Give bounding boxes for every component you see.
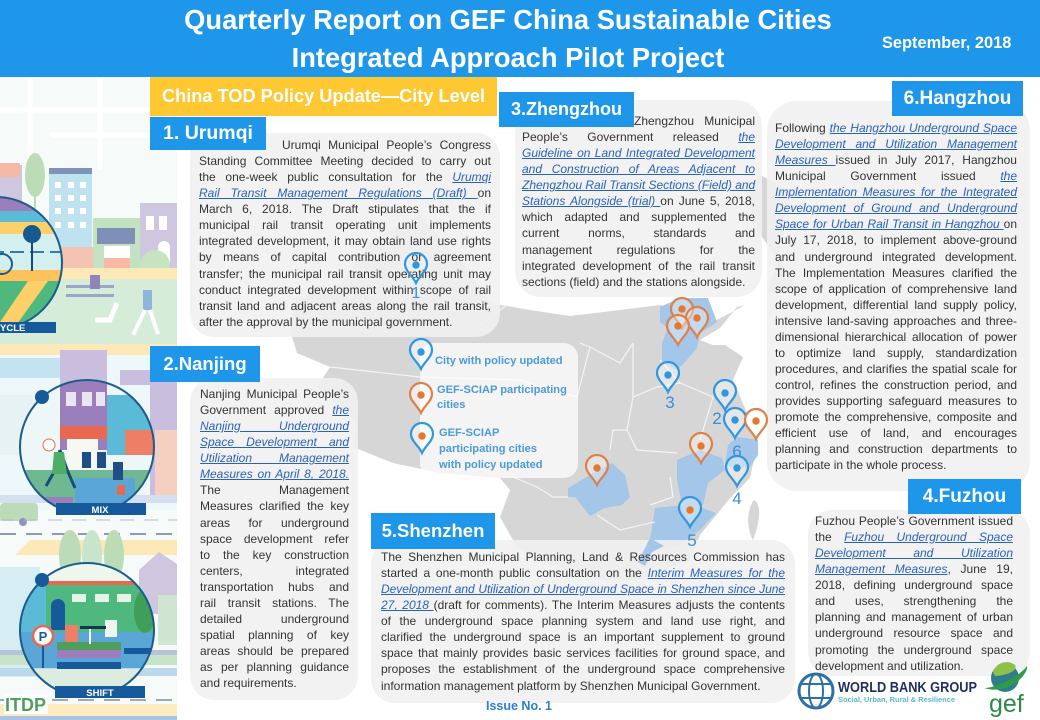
text: Urumqi: transit land and adjacent areas along the rail transit, (199, 299, 491, 313)
text: Nanjing: space development refer (200, 532, 349, 546)
legend: GEF-SCIAP participating cities: GEF-SCIAP participating (437, 384, 567, 396)
text: Fuzhou: planning and management of urban (815, 610, 1013, 624)
text: Hangzhou: promote the comprehensive, composite and (775, 410, 1017, 424)
text: Fuzhou: underground resource space and (815, 626, 1013, 640)
text: Hangzhou: dimensional hierarchical allocation of power (775, 330, 1017, 344)
plaza and paths (0, 268, 177, 355)
text: Fuzhou: promoting the underground space (815, 642, 1013, 656)
text: Hangzhou: control, refines the construction period, and (775, 378, 1017, 392)
text: Hangzhou: efficient use of land, and encourages (775, 426, 1017, 440)
text: Nanjing: Measures on April 8, 2018. (200, 467, 349, 481)
pin: 3 Zhengzhou: 3 (665, 393, 675, 412)
map: Guangdong tail over Shenzhen panel (638, 538, 664, 566)
text: Hangzhou: participate in the whole process. (775, 458, 946, 472)
text: Hangzhou: development, differential land supply policy, (775, 298, 1017, 312)
text: Urumqi: March 6, 2018. The Draft stipulates that the if (199, 202, 491, 216)
text: Hangzhou: Development and Utilization Management (775, 137, 1017, 151)
text: Hangzhou: scope of application of comprehensive land (775, 282, 1017, 296)
date: September, 2018 (882, 34, 1011, 52)
logo: World Bank Group: WORLD BANK GROUP (838, 680, 977, 696)
panel: Fuzhou background (808, 510, 1030, 676)
text: Hangzhou: to optimize land supply, standardization (775, 346, 1017, 360)
text: Nanjing: areas should be prepared (200, 644, 349, 658)
heading: Fuzhou (908, 479, 1021, 514)
header band (0, 0, 1040, 77)
logo: World Bank Group: Social, Urban, Rural & Resilience (838, 697, 955, 704)
text: Hangzhou: July 17, 2018, to implement above-ground (775, 233, 1017, 247)
text: Zhengzhou (522, 114, 756, 289)
text: Urumqi: transfer; the municipal rail transit operating unit may (199, 266, 491, 280)
highlighted provinces (568, 298, 758, 548)
heading: Zhengzhou (499, 92, 634, 127)
panel: Hangzhou background (767, 101, 1030, 491)
text: Nanjing: Nanjing Municipal People’s (200, 387, 349, 401)
text: Hangzhou: Development of Ground and Underground (775, 201, 1017, 215)
text: Shenzhen: space that mainly provides basic services facilities for ground space, and (381, 646, 785, 660)
heading: Urumqi (150, 117, 266, 150)
issue number: Issue No. 1 (486, 699, 552, 713)
text: Shenzhen: proposes the establishment of the underground space comprehensive (381, 662, 785, 676)
logo: World Bank Group (799, 674, 977, 708)
text: Fuzhou: development and utilization. (815, 659, 964, 673)
heading: Nanjing: 2.Nanjing (163, 353, 247, 374)
text: Shenzhen: of the underground space planning system and land use right, and (381, 614, 785, 628)
pin: 5 Shenzhen: 5 (687, 531, 697, 550)
circle: shift (18, 563, 158, 699)
text: Zhengzhou: which adapted and supplemented the (522, 210, 755, 224)
subtitle banner (150, 77, 497, 116)
text: Nanjing: transportation hubs and (200, 580, 349, 594)
title: Quarterly Report on GEF China Sustainable Cities (184, 4, 832, 35)
text: Hangzhou: Following the Hangzhou Underground Space (775, 121, 1017, 135)
text: Shenzhen: clarified the underground space is an important supplement to ground (381, 630, 785, 644)
pin: 1 Urumqi (405, 253, 427, 302)
logo: ITDP: ITDP (5, 695, 46, 715)
text: Nanjing: spatial planning of key (200, 628, 349, 642)
legend: participating cities with policy updated (411, 423, 543, 471)
pins: northern participating cities (667, 298, 708, 345)
pin: 4 Fuzhou: 4 (732, 489, 742, 508)
heading: Shenzhen: 5.Shenzhen (382, 520, 484, 541)
text: Nanjing: centers, integrated (200, 564, 349, 578)
text: Urumqi: Standing Committee Meeting decided to carry out (199, 154, 491, 168)
text: Urumqi: integrated development, it may obtain land use rights (199, 234, 491, 248)
text: Urumqi: Rail Transit Management Regulations (Draft) on (199, 186, 491, 200)
map base (290, 175, 800, 580)
text: Zhengzhou: current norms, standards and (522, 226, 755, 240)
text: Urumqi (199, 138, 492, 329)
text: Nanjing: to the key construction (200, 548, 349, 562)
heading: Nanjing (150, 346, 260, 382)
text: Fuzhou: Development and Utilization (815, 546, 1013, 560)
legend panel (420, 343, 578, 478)
pin: 2 Nanjing: 2 (712, 409, 722, 428)
text: Urumqi: Urumqi Municipal People’s Congress (282, 138, 491, 152)
middle street background (0, 350, 177, 534)
panel: Shenzhen background (371, 540, 795, 703)
text: Fuzhou: Fuzhou People’s Government issued (815, 514, 1013, 528)
text: Hangzhou: Municipal Government issued the (775, 169, 1017, 183)
pin: Nanchang area (690, 433, 712, 463)
title: Integrated Approach Pilot Project (292, 42, 724, 73)
pin: 6 Hangzhou (724, 408, 746, 461)
text: Zhengzhou: Guideline on Land Integrated Development (522, 146, 755, 160)
legend: city with policy updated (410, 339, 563, 369)
text: Zhengzhou: and Construction of Areas Adjacent to (522, 162, 755, 176)
circle: shift: SHIFT (86, 688, 114, 699)
text: Nanjing: The Management (200, 483, 349, 497)
text: Hangzhou: procedures, and clarifies the spatial scale for (775, 362, 1017, 376)
text: Hangzhou: intensive land-saving approaches and three- (775, 314, 1017, 328)
text: Hangzhou: and underground integrated development. (775, 250, 1017, 264)
text: Nanjing: Nanjing Underground (200, 419, 349, 433)
text: Fuzhou: 2018, defining underground space (815, 578, 1013, 592)
text: Zhengzhou: sections (field) and the stations alongside. (522, 275, 745, 289)
text: Urumqi: by means of capital contribution or agreement (199, 250, 491, 264)
legend: GEF-SCIAP participating cities: cities (437, 399, 465, 411)
text: Fuzhou: Management Measures, June 19, (815, 562, 1013, 576)
circle: cycle (0, 197, 70, 334)
text: Hangzhou (775, 121, 1018, 472)
heading: Fuzhou: 4.Fuzhou (923, 486, 1006, 506)
legend: participating cities with policy updated: participating cities (439, 443, 537, 455)
heading: Zhengzhou: 3.Zhengzhou (511, 99, 622, 119)
text: Urumqi: municipal rail transit operating unit implements (199, 218, 491, 232)
text: Nanjing: as per planning guidance (200, 660, 349, 674)
text: Fuzhou (815, 514, 1013, 673)
pin: 3 Zhengzhou (657, 362, 679, 412)
text: Urumqi: after the approval by the municipal government. (199, 315, 452, 329)
text: Shenzhen: information management platform by Shenzhen Municipal Government. (381, 678, 761, 692)
legend: participating cities with policy updated: with policy updated (438, 459, 543, 471)
logo: gef: gef (989, 690, 1024, 718)
circle: shift: P (39, 629, 48, 644)
text: Nanjing: detailed underground (200, 612, 349, 626)
text: Hangzhou: planning and construction departments to (775, 442, 1017, 456)
text: Nanjing: areas for underground (200, 516, 349, 530)
text: Hangzhou: Measures issued in July 2017, Hangzhou (775, 153, 1017, 167)
text: Nanjing: Government approved the (200, 403, 349, 417)
text: Nanjing: Space Development and (200, 435, 349, 449)
map: Taiwan (748, 500, 759, 540)
illustration: TOD street scenes (0, 78, 177, 720)
text: Urumqi: the one-week public consultation for the Urumqi (199, 170, 491, 184)
panel: Zhengzhou background (515, 100, 762, 297)
text: Nanjing: and requirements. (200, 676, 297, 690)
text: Shenzhen (380, 550, 785, 692)
text: Zhengzhou: People’s Government released the (522, 130, 755, 144)
pin: 4 Fuzhou (726, 456, 748, 508)
text: Nanjing: Measures clarified the key (200, 499, 349, 513)
text: Urumqi: conduct integrated development within scope of rail (199, 283, 491, 297)
heading: Urumqi: 1. Urumqi (163, 122, 253, 144)
text: Hangzhou: The Implementation Measures clarified the (775, 266, 1017, 280)
text: Nanjing: rail transit stations. The (200, 596, 349, 610)
pin: 5 Shenzhen (679, 497, 701, 550)
panel: Nanjing background (190, 378, 358, 700)
heading: Hangzhou (892, 81, 1023, 116)
legend: GEF-SCIAP participating cities (410, 383, 567, 413)
pin: 6 Hangzhou: 6 (732, 442, 742, 461)
text: Hangzhou: provides supporting safeguard measures to (775, 394, 1017, 408)
text: Shenzhen: The Shenzhen Municipal Planning, Land & Resources Commission has (381, 550, 785, 564)
text: Nanjing: Utilization Management (200, 451, 349, 465)
text: Zhengzhou: Stations Alongside (trial) on June 5, 2018, (522, 194, 755, 208)
text: Shenzhen: started a one-month public consultation on the Interim Measures for the (381, 566, 785, 580)
logo: gef (984, 662, 1027, 718)
lower street background (0, 530, 177, 720)
province borders (330, 305, 713, 530)
text: Hangzhou: Space for Urban Rail Transit in Hangzhou on (775, 217, 1017, 231)
pin: participating city near Shanghai (745, 409, 767, 439)
pin: Guiyang area (586, 455, 608, 485)
text: Shenzhen: Development and Utilization of Underground Space in Shenzhen since June (381, 582, 785, 596)
circle: mix: MIX (92, 505, 109, 516)
text: Fuzhou: the Fuzhou Underground Space (815, 530, 1013, 544)
heading: Hangzhou: 6.Hangzhou (904, 88, 1011, 108)
circle: mix (18, 378, 158, 520)
text: Zhengzhou: integrated development of the rail transit (522, 259, 755, 273)
circle: cycle: YCLE (0, 323, 25, 334)
building: upper street (0, 153, 177, 290)
text: Fuzhou: and uses, strengthening the (815, 594, 1013, 608)
panel: Urumqi background (190, 133, 500, 337)
text: Hangzhou: Implementation Measures for the Integrated (775, 185, 1017, 199)
pin: 2 Nanjing (712, 380, 736, 428)
text: Shenzhen: 27, 2018 (draft for comments). The Interim Measures adjusts the contents (381, 598, 785, 612)
text: Nanjing (200, 387, 350, 690)
title (184, 4, 832, 73)
text: Zhengzhou: management regulations for the (522, 242, 755, 256)
pin: 1 Urumqi: 1 (412, 285, 421, 302)
text: Zhengzhou: Zhengzhou Rail Transit Sections (Field) and (522, 178, 755, 192)
heading: Shenzhen (371, 513, 495, 549)
subtitle banner: China TOD Policy Update—City Level (162, 86, 485, 106)
legend: participating cities with policy updated: GEF-SCIAP (439, 427, 500, 439)
text: Zhengzhou: Zhengzhou Municipal (634, 114, 755, 128)
legend: city with policy updated: City with policy updated (435, 355, 563, 367)
